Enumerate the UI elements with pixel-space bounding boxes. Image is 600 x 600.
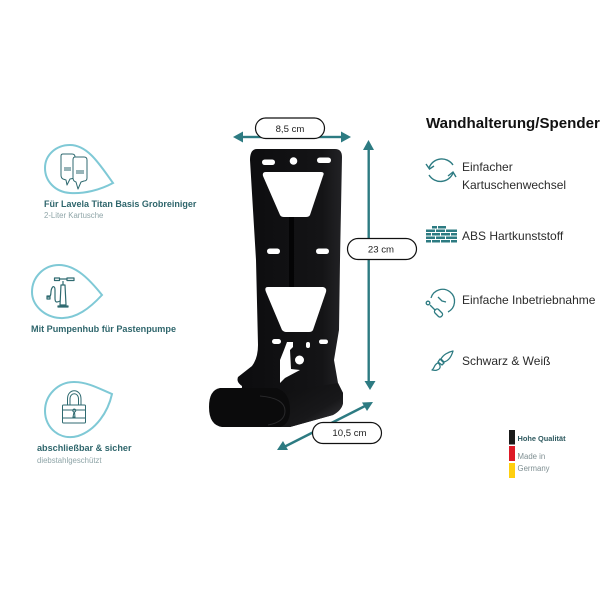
arrow: depth 10.5 cm — [277, 402, 373, 450]
icon: bricks — [426, 226, 457, 242]
roller highlight — [260, 396, 285, 425]
bracket centre groove — [289, 217, 294, 287]
text: theft protected: diebstahlgeschützt — [37, 456, 102, 465]
heading: pump feature: Mit Pumpenhub für Pastenpumpe — [31, 324, 176, 334]
arrow: height 23 cm — [363, 140, 376, 390]
label: 8,5 cm: 8,5 cm — [276, 124, 304, 135]
label: 23 cm: 23 cm — [368, 244, 394, 256]
arrow: width 8.5 cm — [233, 132, 351, 142]
heading: lock feature: abschließbar & sicher — [37, 443, 132, 453]
icon: teardrop outline with cartridges — [45, 145, 113, 193]
title: Wandhalterung/Spender — [426, 115, 600, 132]
icon: clock and screwdriver — [426, 289, 455, 318]
heading: cartridge feature: Für Lavela Titan Basis Grobreiniger — [44, 199, 197, 209]
text: easy setup: Einfache Inbetriebnahme — [462, 293, 596, 307]
bracket silhouette — [238, 149, 343, 427]
flag stripes — [509, 430, 515, 478]
icon: teardrop outline with padlock — [45, 382, 112, 437]
base body — [270, 383, 343, 427]
icon: teardrop outline with pump — [32, 265, 102, 318]
text: easy cartridge change: Kartuschenwechsel — [462, 178, 566, 192]
panel: pump feature — [31, 265, 176, 334]
label: 10,5 cm: 10,5 cm — [332, 428, 367, 439]
text: origin: Made in — [518, 452, 545, 461]
panel: Lavela cartridge feature — [44, 145, 197, 220]
feature: easy setup — [426, 289, 596, 318]
panel: lock feature — [37, 382, 132, 465]
text: origin: Germany — [518, 464, 550, 473]
feature: easy cartridge change — [426, 159, 566, 192]
text: cartridge size: 2-Liter Kartusche — [44, 211, 103, 220]
badge: made in Germany — [509, 430, 566, 478]
text: easy cartridge change: Einfacher — [462, 160, 513, 174]
label: 23 cm — [348, 238, 416, 260]
slots and screw holes — [262, 157, 331, 364]
label: 8,5 cm — [256, 118, 324, 138]
lower notch — [280, 342, 300, 383]
text: quality: Hohe Qualität — [518, 434, 566, 443]
label: 10,5 cm — [312, 422, 382, 444]
feature: black and white — [432, 351, 550, 370]
icon: paint brush — [432, 351, 453, 370]
text: ABS plastic: ABS Hartkunststoff — [462, 229, 564, 243]
product: wall bracket — [209, 149, 343, 427]
feature: ABS plastic — [426, 226, 564, 243]
icon: swap arrows — [426, 159, 456, 181]
roller — [209, 388, 290, 427]
text: black and white: Schwarz & Weiß — [462, 354, 550, 368]
